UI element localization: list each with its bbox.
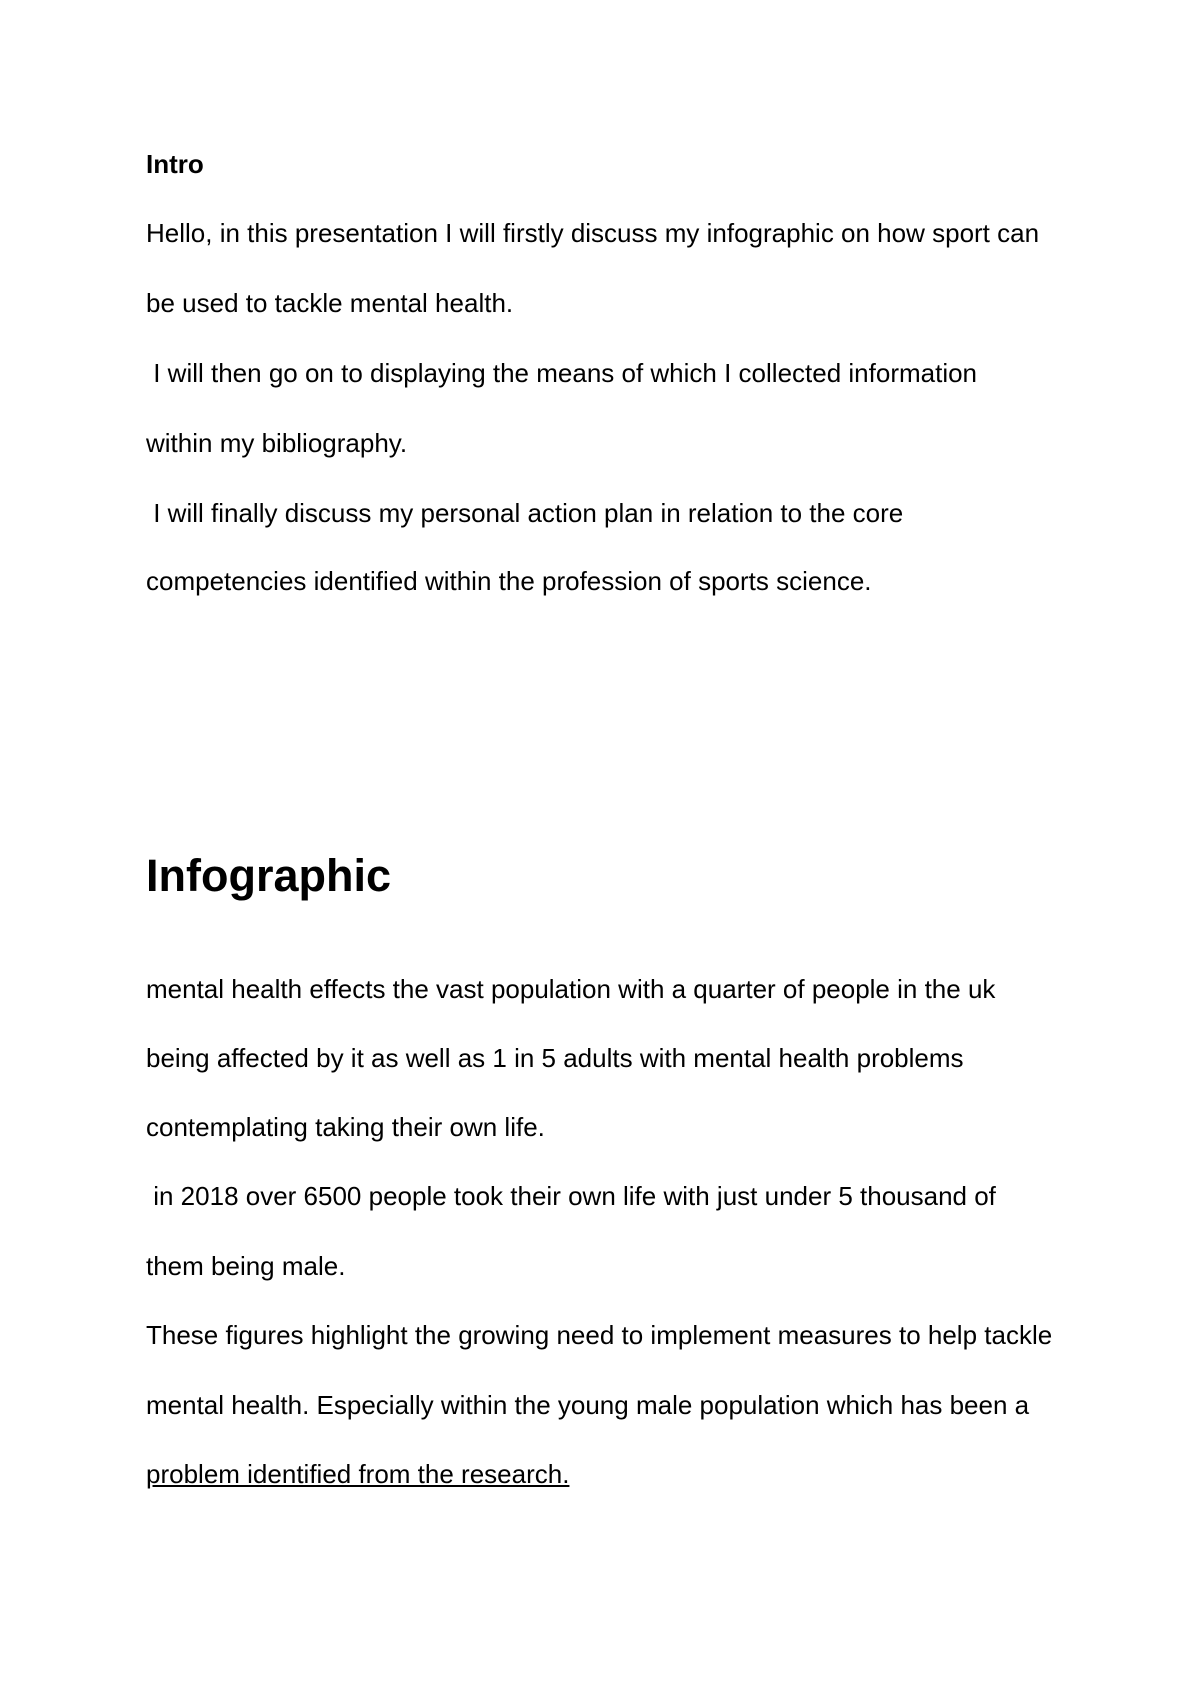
text block: infographic paragraph: being affected by it as well as 1 in 5 adults with mental health problems xyxy=(146,1043,964,1073)
text block: infographic paragraph: mental health effects the vast population with a quarter of people in the uk xyxy=(146,974,995,1004)
text block: intro paragraph: be used to tackle mental health. xyxy=(146,288,513,318)
text block: infographic paragraph: problem identified from the research. xyxy=(146,1459,569,1489)
text block: infographic paragraph: in 2018 over 6500 people took their own life with just under 5 thousand of xyxy=(153,1181,996,1211)
text block: intro paragraph: within my bibliography. xyxy=(146,428,407,458)
text block: infographic paragraph: them being male. xyxy=(146,1251,345,1281)
text block: intro paragraph: Hello, in this presentation I will firstly discuss my infographic on how sport can xyxy=(146,218,1039,248)
text block: intro paragraph: competencies identified within the profession of sports science. xyxy=(146,566,872,596)
heading: infographic: Infographic xyxy=(146,850,391,901)
text block: infographic paragraph: mental health. Especially within the young male population which has been a xyxy=(146,1390,1029,1420)
text block: intro paragraph: I will finally discuss my personal action plan in relation to the core xyxy=(153,498,903,528)
text block: infographic paragraph: contemplating taking their own life. xyxy=(146,1112,545,1142)
text block: infographic paragraph xyxy=(146,974,1052,1489)
heading: intro: Intro xyxy=(146,149,204,179)
text block: intro paragraph xyxy=(146,218,1039,596)
text block: infographic paragraph: These figures highlight the growing need to implement measures to help tackle xyxy=(146,1320,1052,1350)
text block: intro paragraph: I will then go on to displaying the means of which I collected information xyxy=(153,358,977,388)
